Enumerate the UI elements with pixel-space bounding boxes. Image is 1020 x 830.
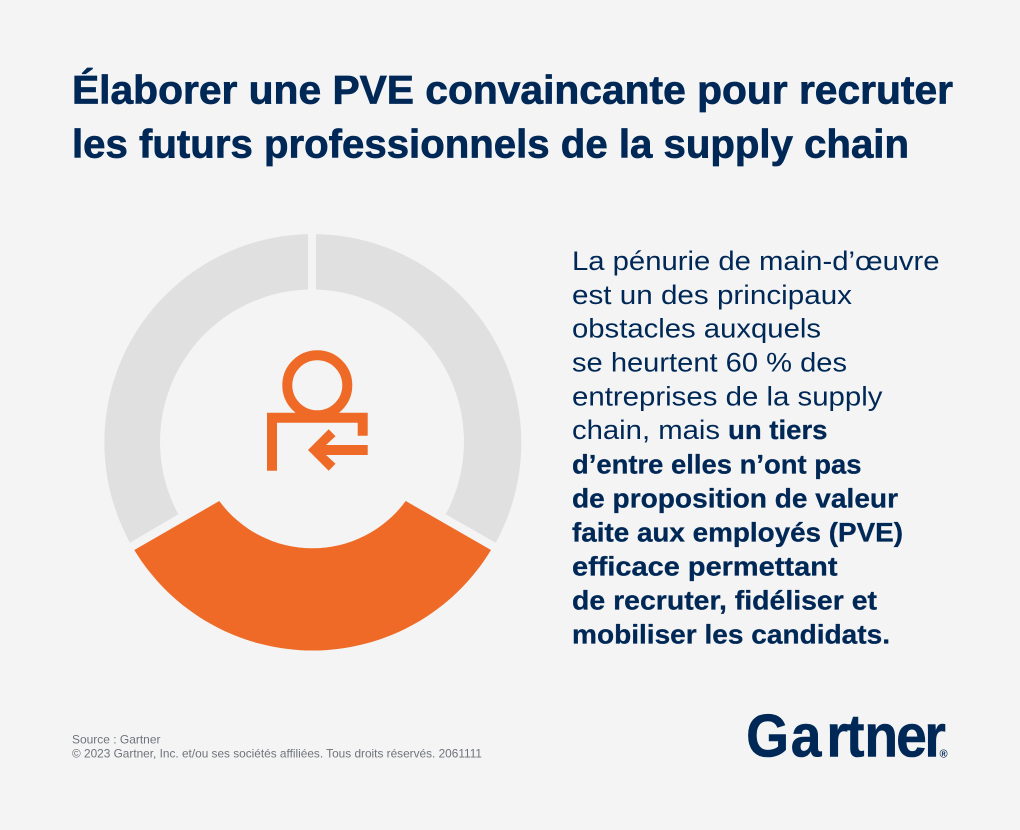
body text: entreprises de la supply [572,381,883,411]
title: Élaborer une PVE convaincante pour recruter [72,68,953,112]
source note [72,732,482,760]
body text: un tiers [728,415,828,445]
body text: mobiliser les candidats. [572,619,890,649]
body text: La pénurie de main-d’œuvre [572,246,940,276]
segment: grey left [104,234,308,543]
body text: d’entre elles n’ont pas [572,449,862,479]
body text: chain, mais [572,415,720,445]
logo: Gartner: ® [940,748,948,760]
source note: Source : Gartner [72,732,160,746]
title: les futurs professionnels de la supply chain [72,122,909,166]
icon: person with incoming arrow [272,355,368,471]
title [72,68,953,166]
segment: grey right [316,234,521,543]
body text: de recruter, fidéliser et [572,585,877,615]
body text: de proposition de valeur [572,483,899,513]
donut chart [104,234,521,651]
body text [572,246,940,649]
body text: se heurtent 60 % des [572,348,847,378]
body text: efficace permettant [572,552,838,582]
body text: obstacles auxquels [572,314,821,344]
source note: © 2023 Gartner, Inc. et/ou ses sociétés affiliées. Tous droits réservés. 2061111 [72,746,482,760]
body text: est un des principaux [572,280,853,310]
segment: orange one third [134,501,491,651]
logo: Gartner: Gartner [746,704,946,770]
body text: faite aux employés (PVE) [572,518,903,548]
